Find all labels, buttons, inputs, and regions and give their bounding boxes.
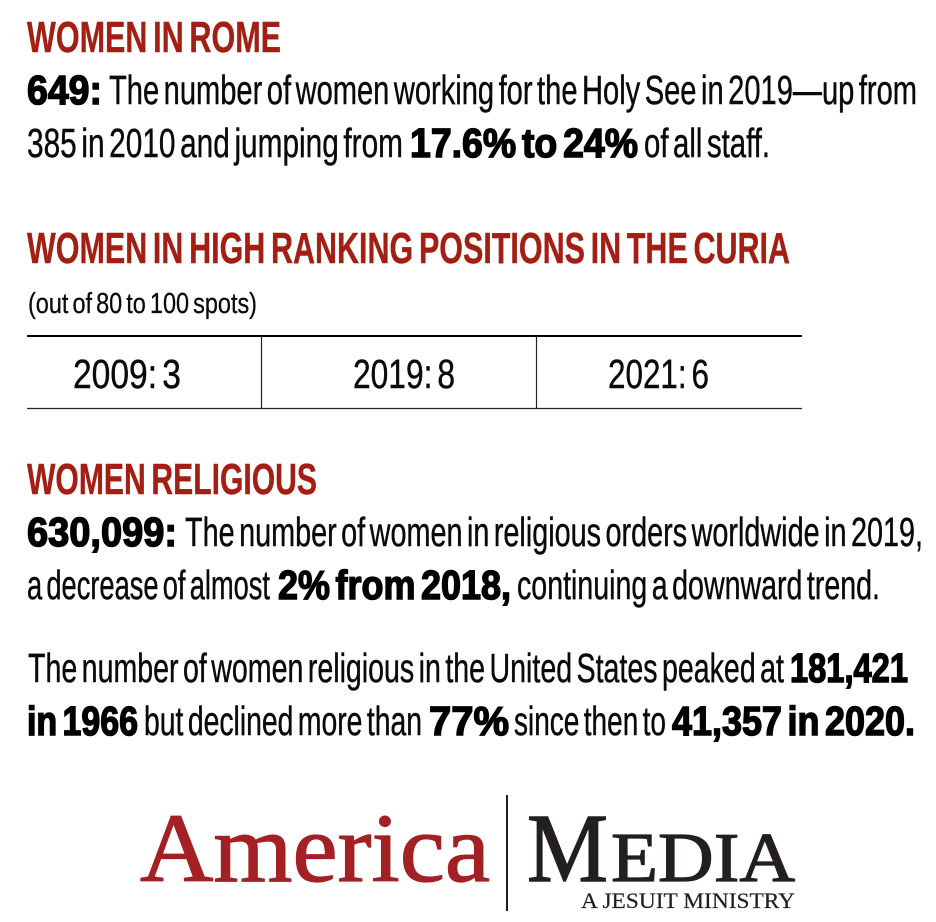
text block: United States women religious: 77% (429, 698, 509, 744)
table: positions by year: 2019: 8 (353, 351, 455, 397)
heading: women in Rome: WOMEN IN ROME (27, 13, 281, 62)
text block: United States women religious: 181,421 (790, 645, 908, 691)
text block: Holy See staff: 649: (27, 67, 102, 113)
logo: America Media: EDIA (611, 820, 795, 897)
table: positions by year: 2021: 6 (608, 351, 709, 397)
text block: Holy See staff (27, 67, 917, 166)
text block: Holy See staff: 17.6% to 24% (410, 120, 638, 166)
logo: America Media: A JESUIT MINISTRY (581, 888, 795, 913)
logo: America Media: America (140, 795, 490, 903)
text block: Holy See staff: 385 in 2010 and jumping from (27, 120, 403, 166)
text block: worldwide women religious (27, 509, 923, 608)
text block: Holy See staff: of all staff. (644, 120, 770, 166)
text block: worldwide women religious: 630,099: (27, 509, 177, 555)
heading: women religious: WOMEN RELIGIOUS (27, 455, 317, 504)
text block: worldwide women religious: 2% from 2018, (278, 562, 511, 608)
text block: United States women religious: but declined more than (144, 698, 422, 744)
logo: America Media (140, 795, 795, 913)
text block: United States women religious: in 1966 (27, 698, 138, 744)
text block: worldwide women religious: a decrease of almost (27, 562, 270, 608)
text block: United States women religious: since then to (514, 698, 666, 744)
table: positions by year (27, 336, 802, 408)
subheading: out of 80 to 100 spots: (out of 80 to 100 spots) (28, 288, 257, 320)
table: positions by year: 2009: 3 (73, 351, 181, 397)
text block: United States women religious (27, 645, 915, 744)
logo: America Media: M (527, 795, 608, 903)
